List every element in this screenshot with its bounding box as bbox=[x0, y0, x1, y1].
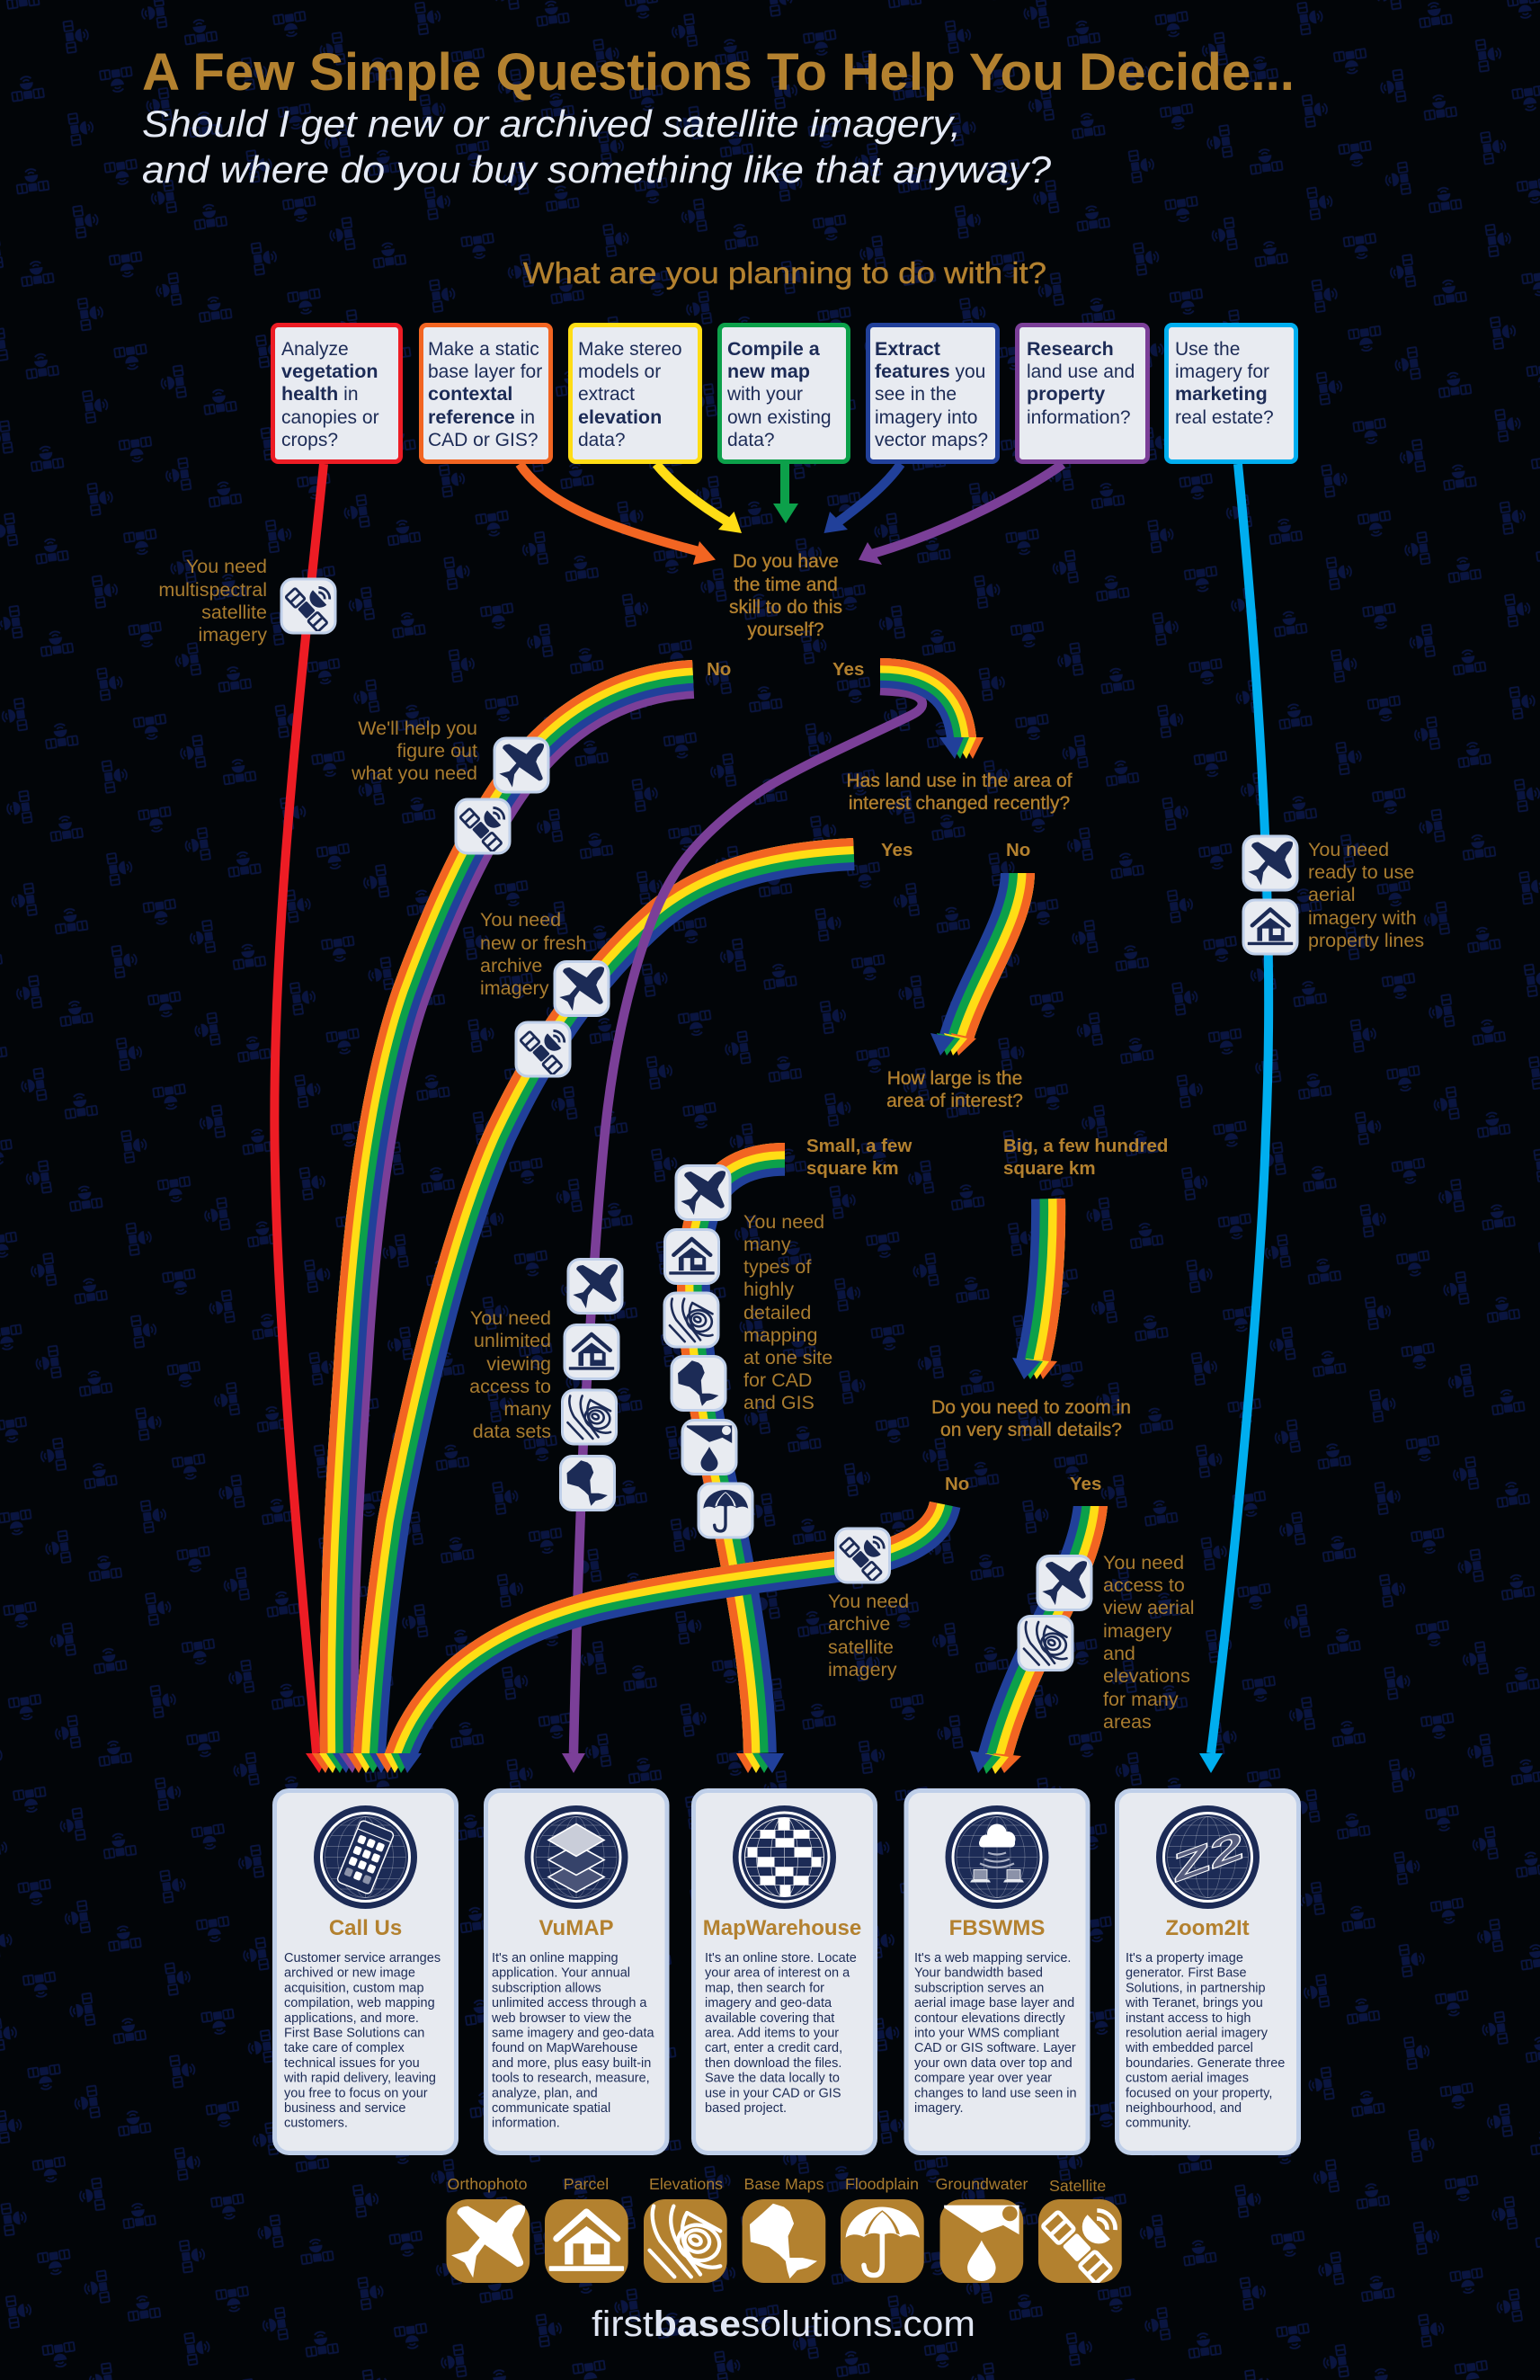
label: we will help: what you need bbox=[351, 762, 477, 784]
card text: with embedded parcel bbox=[1125, 2041, 1253, 2055]
icon tile: VuMAP house bbox=[565, 1325, 619, 1379]
arrow: red line to Call Us bbox=[274, 464, 324, 1753]
legend: Base Maps: Base Maps bbox=[744, 2175, 824, 2193]
panel: Zoom2It bbox=[1117, 1791, 1298, 2153]
rainbow: zoom Yes to FBSWMS bbox=[970, 1506, 1108, 1774]
arrow: cyan line to Zoom2It bbox=[1199, 464, 1268, 1773]
question: zoom in: on very small details? bbox=[940, 1420, 1122, 1440]
card text: focused on your property, bbox=[1126, 2086, 1272, 2100]
card text: It's an online mapping bbox=[492, 1951, 619, 1966]
panel: question 1 vegetation: health bbox=[281, 383, 338, 405]
card text: technical issues for you bbox=[284, 2056, 420, 2071]
label: many types: types of bbox=[743, 1256, 811, 1278]
label: multispectral: multispectral bbox=[158, 579, 267, 601]
panel: question 1 vegetation: in bbox=[338, 384, 359, 405]
card text: Your bandwidth based bbox=[914, 1966, 1043, 1981]
label: unlimited viewing: many bbox=[503, 1398, 551, 1420]
card text: information. bbox=[492, 2117, 560, 2131]
panel: question 5 extract features: see in the bbox=[875, 384, 957, 405]
label: archive satellite: You need bbox=[828, 1591, 909, 1612]
legend: Floodplain: Floodplain bbox=[845, 2175, 919, 2193]
label: unlimited viewing: viewing bbox=[486, 1353, 551, 1375]
label: many types: many bbox=[743, 1234, 791, 1255]
answer: small: Small, a few bbox=[806, 1136, 912, 1156]
card text: your own data over top and bbox=[914, 2056, 1073, 2071]
card text: cart, enter a credit card, bbox=[705, 2041, 842, 2055]
arrow: purple to question bbox=[859, 464, 1063, 565]
rainbow: Yes to land use question bbox=[880, 658, 984, 759]
icon tile: MapWarehouse house bbox=[665, 1230, 719, 1284]
label: ready to use aerial: imagery with bbox=[1308, 907, 1417, 929]
panel: question 7 marketing: imagery for bbox=[1175, 361, 1269, 382]
card text: imagery. bbox=[914, 2101, 964, 2116]
card title: Zoom2It bbox=[1165, 1916, 1250, 1940]
icon: cloud globe bbox=[946, 1805, 1048, 1909]
card text: It's an online store. Locate bbox=[705, 1951, 857, 1966]
card text: unlimited access through a bbox=[492, 1996, 647, 2010]
card title: Call Us bbox=[329, 1916, 402, 1940]
label: aerial and elevations: view aerial bbox=[1103, 1597, 1195, 1618]
panel: question 3 elevation: elevation bbox=[578, 406, 662, 428]
question: land use: interest changed recently? bbox=[849, 793, 1070, 814]
panel: question 6 research: property bbox=[1027, 383, 1105, 405]
icon: layers globe bbox=[525, 1805, 628, 1909]
label: ready to use aerial: property lines bbox=[1308, 930, 1424, 951]
icon tile: MapWarehouse base map bbox=[672, 1356, 725, 1410]
arrow: orange to question bbox=[520, 464, 716, 565]
title: A Few Simple Questions To Help You Decide... bbox=[142, 43, 1295, 102]
legend: Floodplain bbox=[841, 2175, 924, 2283]
card text: compilation, web mapping bbox=[284, 1996, 435, 2010]
icon tile: MapWarehouse groundwater bbox=[682, 1421, 736, 1475]
panel: question 4 new map bbox=[719, 325, 849, 462]
card text: neighbourhood, and bbox=[1126, 2101, 1242, 2116]
arrow: yellow to question bbox=[656, 464, 742, 533]
card text: map, then search for bbox=[705, 1981, 824, 1995]
label: aerial and elevations: areas bbox=[1103, 1711, 1152, 1733]
card title: VuMAP bbox=[539, 1916, 614, 1940]
card text: acquisition, custom map bbox=[284, 1981, 424, 1995]
arrow: blue to question bbox=[823, 464, 901, 533]
label: archive satellite: imagery bbox=[828, 1659, 897, 1680]
card text: customers. bbox=[284, 2117, 348, 2131]
question: how large: How large is the bbox=[887, 1068, 1022, 1089]
card text: subscription serves an bbox=[914, 1981, 1044, 1995]
panel: question 5 extract features bbox=[868, 325, 998, 462]
card text: your area of interest on a bbox=[705, 1966, 850, 1981]
question: land use: Has land use in the area of bbox=[847, 771, 1073, 791]
rainbow: small area to MapWarehouse bbox=[677, 1143, 785, 1773]
panel: question 1 vegetation: Analyze bbox=[281, 339, 349, 360]
question: zoom in: Do you need to zoom in bbox=[931, 1397, 1131, 1418]
icon tile: MapWarehouse contour bbox=[664, 1293, 718, 1347]
panel: question 7 marketing: real estate? bbox=[1175, 407, 1274, 428]
panel: question 3 elevation: Make stereo bbox=[578, 339, 682, 360]
icon tile: FBSWMS plane bbox=[1037, 1555, 1091, 1609]
answer: No land use: No bbox=[1006, 840, 1030, 860]
card text: communicate spatial bbox=[492, 2101, 610, 2116]
panel: question 5 extract features: vector maps? bbox=[875, 430, 988, 450]
answer: small: square km bbox=[806, 1158, 899, 1179]
panel: question 2 contextual reference: reference bbox=[428, 406, 515, 428]
answer: No zoom: No bbox=[945, 1474, 969, 1494]
panel: question 2 contextual reference: CAD or GIS? bbox=[428, 430, 539, 450]
card text: area. Add items to your bbox=[705, 2027, 839, 2041]
panel: question 3 elevation: models or bbox=[578, 361, 661, 382]
label: unlimited viewing: access to bbox=[469, 1376, 551, 1397]
legend: Parcel bbox=[545, 2175, 628, 2283]
panel: question 7 marketing bbox=[1167, 325, 1296, 462]
panel: question 3 elevation: data? bbox=[578, 430, 626, 450]
panel: question 5 extract features: imagery into bbox=[875, 407, 977, 428]
icon tile: MapWarehouse floodplain bbox=[699, 1484, 752, 1538]
card text: aerial image base layer and bbox=[914, 1996, 1074, 2010]
card text: community. bbox=[1126, 2117, 1191, 2131]
icon tile: satellite fresh bbox=[516, 1017, 577, 1076]
icon: checkered globe bbox=[733, 1805, 836, 1909]
label: aerial and elevations: for many bbox=[1103, 1689, 1179, 1710]
card text: contour elevations directly bbox=[914, 2011, 1065, 2026]
panel: question 5 extract features: features bbox=[875, 361, 950, 382]
icon tile: satellite help bbox=[456, 794, 517, 853]
card title: FBSWMS bbox=[949, 1916, 1045, 1940]
icon tile: Zoom2It plane bbox=[1243, 836, 1297, 890]
card text: application. Your annual bbox=[492, 1966, 630, 1981]
card text: applications, and more. bbox=[284, 2011, 419, 2026]
panel: question 4 new map: data? bbox=[727, 430, 775, 450]
question: time and skill: Do you have bbox=[733, 551, 839, 572]
card text: generator. First Base bbox=[1126, 1966, 1247, 1981]
card text: with rapid delivery, leaving bbox=[283, 2072, 436, 2086]
label: many types: mapping bbox=[743, 1324, 817, 1346]
label: we will help: figure out bbox=[396, 740, 477, 762]
question: time and skill: the time and bbox=[734, 575, 838, 595]
answer: Yes: Yes bbox=[832, 659, 864, 680]
question: time and skill: yourself? bbox=[747, 620, 824, 640]
answer: big: Big, a few hundred bbox=[1003, 1136, 1168, 1156]
label: many types: You need bbox=[743, 1211, 824, 1233]
card text: tools to research, measure, bbox=[492, 2072, 650, 2086]
answer: No: No bbox=[707, 659, 731, 680]
label: new or fresh archive: imagery bbox=[480, 977, 549, 999]
label: ready to use aerial: aerial bbox=[1308, 884, 1356, 905]
panel: question 6 research: land use and bbox=[1027, 361, 1135, 382]
label: many types: detailed bbox=[743, 1302, 811, 1324]
panel: question 4 new map: with your bbox=[726, 384, 803, 405]
legend: Parcel: Parcel bbox=[564, 2175, 609, 2193]
card text: available covering that bbox=[705, 2011, 834, 2026]
panel: VuMAP bbox=[485, 1791, 667, 2153]
panel: question 7 marketing: Use the bbox=[1175, 339, 1240, 360]
rainbow: zoom No to Call Us bbox=[385, 1502, 930, 1753]
label: archive satellite: archive bbox=[828, 1613, 890, 1635]
icon tile: archive satellite bbox=[836, 1523, 897, 1582]
card text: found on MapWarehouse bbox=[492, 2041, 637, 2055]
card text: custom aerial images bbox=[1126, 2072, 1249, 2086]
panel: question 1 vegetation bbox=[273, 325, 401, 462]
arrow: green to question bbox=[773, 464, 798, 523]
panel: FBSWMS bbox=[906, 1791, 1088, 2153]
legend: Groundwater bbox=[936, 2175, 1028, 2283]
icon tile: plane fresh bbox=[555, 962, 609, 1016]
panel: question 1 vegetation: vegetation bbox=[281, 361, 378, 382]
card text: then download the files. bbox=[705, 2056, 841, 2071]
card text: Solutions, in partnership bbox=[1126, 1981, 1266, 1995]
arrow: purple Yes line to VuMAP bbox=[562, 691, 922, 1773]
label: new or fresh archive: new or fresh bbox=[480, 932, 586, 954]
panel: question 4 new map: new map bbox=[727, 361, 810, 382]
label: many types: at one site bbox=[743, 1347, 832, 1368]
icon tile: satellite multispectral bbox=[281, 574, 343, 633]
card text: instant access to high bbox=[1126, 2011, 1251, 2026]
label: many types: for CAD bbox=[743, 1369, 812, 1391]
card text: you free to focus on your bbox=[284, 2086, 428, 2100]
icon tile: FBSWMS contour bbox=[1019, 1617, 1073, 1671]
label: unlimited viewing: unlimited bbox=[474, 1330, 551, 1351]
card text: based project. bbox=[705, 2101, 787, 2116]
card text: compare year over year bbox=[914, 2072, 1052, 2086]
legend: Orthophoto bbox=[446, 2175, 530, 2283]
panel: question 3 elevation bbox=[570, 325, 699, 462]
panel: question 5 extract features: you bbox=[950, 361, 985, 382]
card text: use in your CAD or GIS bbox=[705, 2086, 841, 2100]
subtitle line 2: and where do you buy something like that anyway? bbox=[142, 148, 1052, 191]
label: aerial and elevations: and bbox=[1103, 1643, 1135, 1664]
icon tile: Zoom2It house bbox=[1243, 900, 1297, 954]
legend: Satellite bbox=[1038, 2177, 1137, 2284]
panel: question 6 research bbox=[1018, 325, 1147, 462]
panel: question 2 contextual reference: contextal bbox=[428, 383, 512, 405]
arrowheads: Call Us bundle bbox=[306, 1753, 422, 1773]
card text: It's a web mapping service. bbox=[914, 1951, 1071, 1966]
answer: big: square km bbox=[1003, 1158, 1096, 1179]
rainbow: big area to zoom question bbox=[1012, 1199, 1065, 1380]
panel: question 4 new map: own existing bbox=[727, 407, 832, 428]
card text: resolution aerial imagery bbox=[1126, 2027, 1268, 2041]
label: many types: highly bbox=[743, 1279, 794, 1300]
icon tile: plane help bbox=[494, 738, 548, 792]
panel: question 1 vegetation: canopies or bbox=[281, 407, 379, 428]
panel: question 4 new map: Compile a bbox=[727, 338, 821, 360]
legend: Elevations: Elevations bbox=[649, 2175, 723, 2193]
card text: with Teranet, brings you bbox=[1125, 1996, 1263, 2010]
rainbow: land use Yes to Call Us bbox=[353, 838, 853, 1753]
label: unlimited viewing: data sets bbox=[473, 1421, 551, 1442]
heading: what are you planning: What are you planning to do with it? bbox=[523, 256, 1046, 290]
card text: First Base Solutions can bbox=[284, 2027, 424, 2041]
card text: web browser to view the bbox=[491, 2011, 632, 2026]
question: how large: area of interest? bbox=[886, 1091, 1023, 1111]
panel: question 3 elevation: extract bbox=[578, 384, 635, 405]
panel: question 2 contextual reference: base layer for bbox=[428, 361, 542, 382]
icon tile: VuMAP contour bbox=[563, 1390, 617, 1444]
label: ready to use aerial: You need bbox=[1308, 839, 1389, 860]
card text: archived or new image bbox=[284, 1966, 415, 1981]
panel: question 2 contextual reference: in bbox=[515, 407, 535, 428]
label: aerial and elevations: imagery bbox=[1103, 1620, 1172, 1642]
legend: Elevations bbox=[644, 2175, 727, 2283]
label: unlimited viewing: You need bbox=[470, 1307, 551, 1329]
label: archive satellite: satellite bbox=[828, 1636, 894, 1658]
label: aerial and elevations: elevations bbox=[1103, 1665, 1190, 1687]
label: aerial and elevations: access to bbox=[1103, 1574, 1185, 1596]
rainbow: land use No to area question bbox=[930, 873, 1035, 1059]
panel: question 2 contextual reference bbox=[421, 325, 550, 462]
label: ready to use aerial: ready to use bbox=[1308, 861, 1414, 883]
footer website: firstbasesolutions .com bbox=[592, 2304, 975, 2344]
label: multispectral: imagery bbox=[199, 624, 267, 646]
question: time and skill: skill to do this bbox=[729, 597, 842, 618]
label: multispectral: You need bbox=[186, 556, 267, 577]
card text: and more, plus easy built-in bbox=[492, 2056, 651, 2071]
label: multispectral: satellite bbox=[201, 602, 267, 623]
icon: Z2 globe bbox=[1156, 1805, 1260, 1909]
legend: Satellite: Satellite bbox=[1049, 2177, 1106, 2195]
answer: Yes land use: Yes bbox=[881, 840, 912, 860]
panel: question 6 research: information? bbox=[1027, 407, 1131, 428]
panel: question 2 contextual reference: Make a static bbox=[428, 339, 539, 360]
panel: question 7 marketing: marketing bbox=[1175, 383, 1268, 405]
card text: boundaries. Generate three bbox=[1126, 2056, 1285, 2071]
card text: CAD or GIS software. Layer bbox=[914, 2041, 1076, 2055]
card text: subscription allows bbox=[492, 1981, 601, 1995]
legend: Base Maps bbox=[743, 2175, 825, 2283]
card text: same imagery and geo-data bbox=[492, 2027, 654, 2041]
label: we will help: We'll help you bbox=[358, 718, 477, 739]
card text: into your WMS compliant bbox=[914, 2027, 1059, 2041]
card text: business and service bbox=[284, 2101, 405, 2116]
card title: MapWarehouse bbox=[703, 1916, 861, 1940]
label: many types: and GIS bbox=[743, 1392, 815, 1413]
panel: Call Us bbox=[275, 1791, 457, 2153]
icon tile: VuMAP plane bbox=[568, 1259, 622, 1313]
icon: Z2 globe: Z2 bbox=[1163, 1824, 1251, 1890]
answer: Yes zoom: Yes bbox=[1070, 1474, 1101, 1494]
legend: Orthophoto: Orthophoto bbox=[448, 2175, 528, 2193]
card text: imagery and geo-data bbox=[705, 1996, 832, 2010]
icon tile: VuMAP base map bbox=[561, 1457, 615, 1511]
label: new or fresh archive: You need bbox=[480, 909, 561, 931]
icon: phone globe bbox=[314, 1805, 417, 1909]
panel: question 6 research: Research bbox=[1027, 338, 1114, 360]
legend: Groundwater: Groundwater bbox=[936, 2175, 1028, 2193]
panel: question 1 vegetation: crops? bbox=[281, 430, 338, 450]
subtitle line 1: Should I get new or archived satellite imagery, bbox=[142, 103, 961, 145]
card text: take care of complex bbox=[284, 2041, 405, 2055]
rainbow: No to Call Us bbox=[320, 660, 692, 1753]
panel: MapWarehouse bbox=[694, 1791, 876, 2153]
card text: Customer service arranges bbox=[284, 1951, 441, 1966]
label: new or fresh archive: archive bbox=[480, 955, 542, 976]
card text: changes to land use seen in bbox=[914, 2086, 1077, 2100]
panel: question 5 extract features: Extract bbox=[875, 338, 940, 360]
label: aerial and elevations: You need bbox=[1103, 1552, 1184, 1573]
card text: It's a property image bbox=[1126, 1951, 1243, 1966]
icon tile: MapWarehouse plane bbox=[676, 1165, 730, 1219]
card text: analyze, plan, and bbox=[492, 2086, 598, 2100]
card text: Save the data locally to bbox=[705, 2072, 840, 2086]
